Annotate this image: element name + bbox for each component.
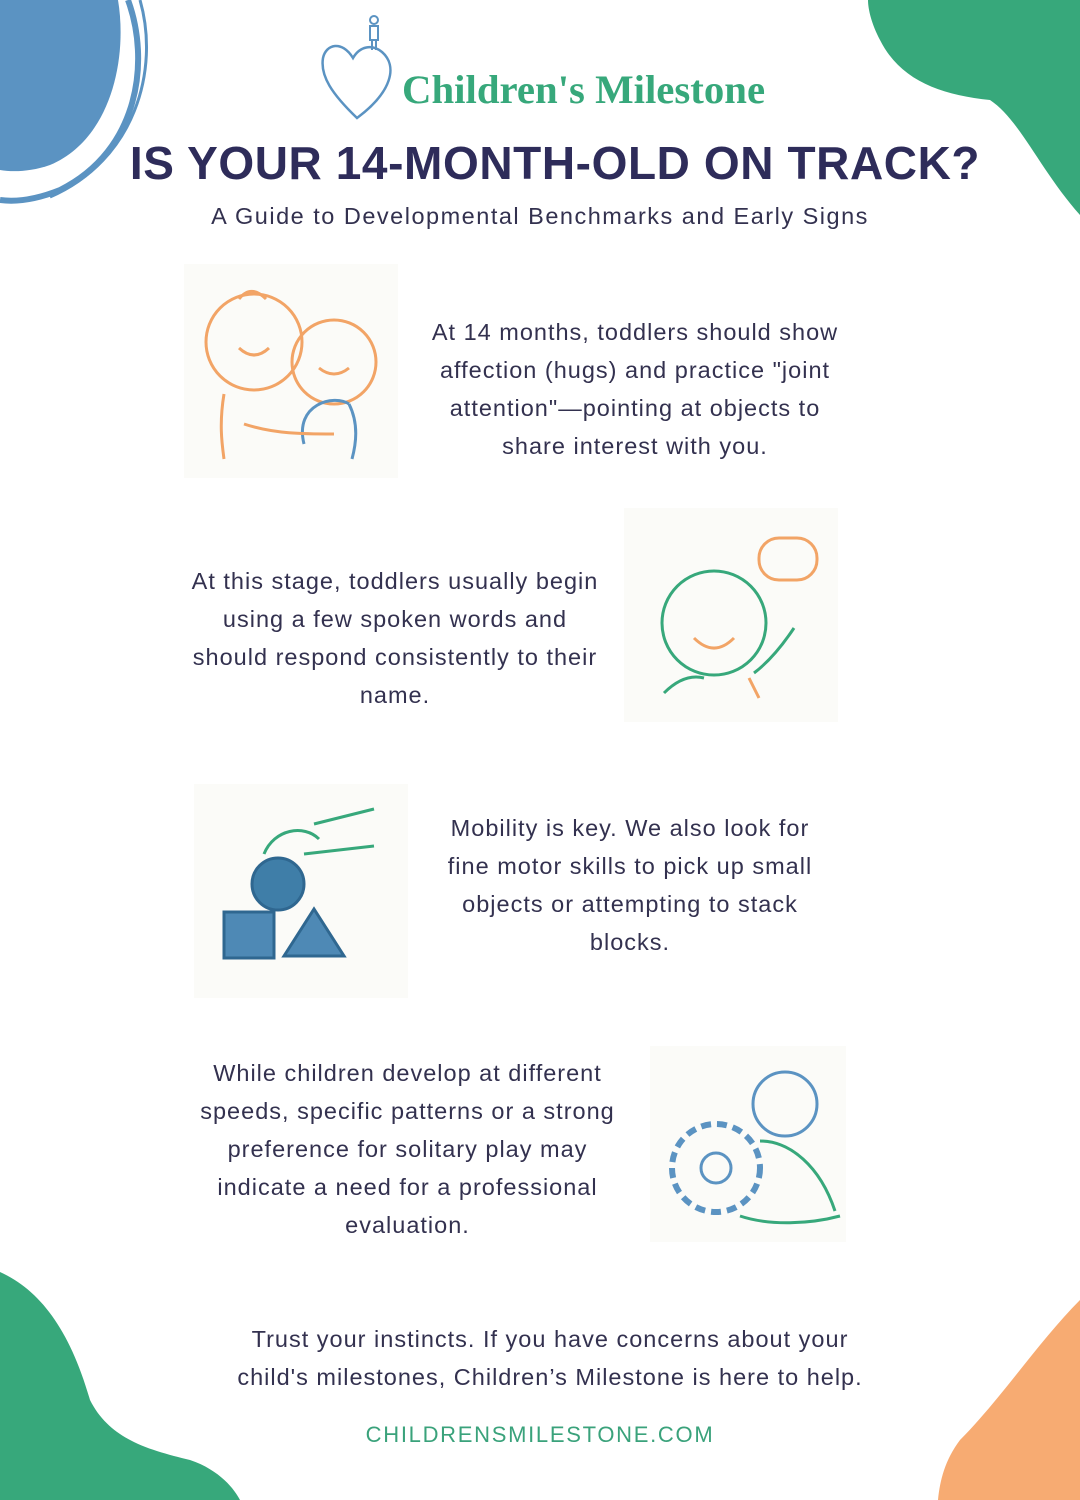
icon: baby with gear	[650, 1046, 846, 1242]
text: affection	[432, 319, 838, 459]
text: evaluation: evaluation.	[345, 1212, 470, 1238]
text: affection: attention"—pointing at objects to	[450, 395, 820, 421]
text: evaluation: preference for solitary play may	[228, 1136, 587, 1162]
text: evaluation: indicate a need for a professional	[217, 1174, 598, 1200]
title: IS YOUR 14-MONTH-OLD ON TRACK?	[130, 137, 980, 189]
icon: blocks	[194, 784, 408, 998]
text: mobility: objects or attempting to stack	[462, 891, 798, 917]
closing text: child's milestones, Children’s Milestone is here to help.	[237, 1364, 863, 1390]
icon: baby waving	[624, 508, 838, 722]
text: mobility: blocks.	[590, 929, 670, 955]
text: words	[192, 568, 598, 708]
text: mobility	[448, 815, 812, 955]
text: words: name.	[360, 682, 430, 708]
closing text: Trust your instincts. If you have concerns about your	[252, 1326, 848, 1352]
text: evaluation: While children develop at different	[213, 1060, 602, 1086]
text: affection: affection (hugs) and practice "joint	[440, 357, 830, 383]
logo	[321, 15, 765, 120]
text: words: using a few spoken words and	[223, 606, 567, 632]
text: words: At this stage, toddlers usually begin	[192, 568, 598, 594]
logo text: Children's Milestone	[402, 67, 765, 112]
text: affection: At 14 months, toddlers should show	[432, 319, 838, 345]
closing text	[237, 1326, 863, 1390]
text: evaluation: speeds, specific patterns or a strong	[200, 1098, 615, 1124]
icon: hugging kids	[184, 264, 398, 478]
icon: heart with child	[321, 15, 392, 120]
website: CHILDRENSMILESTONE.COM	[366, 1422, 714, 1447]
text: mobility: fine motor skills to pick up small	[448, 853, 812, 879]
text: words: should respond consistently to their	[193, 644, 597, 670]
subtitle: A Guide to Developmental Benchmarks and Early Signs	[211, 203, 869, 229]
text: mobility: Mobility is key. We also look for	[451, 815, 809, 841]
text: evaluation	[200, 1060, 615, 1238]
text: affection: share interest with you.	[502, 433, 768, 459]
